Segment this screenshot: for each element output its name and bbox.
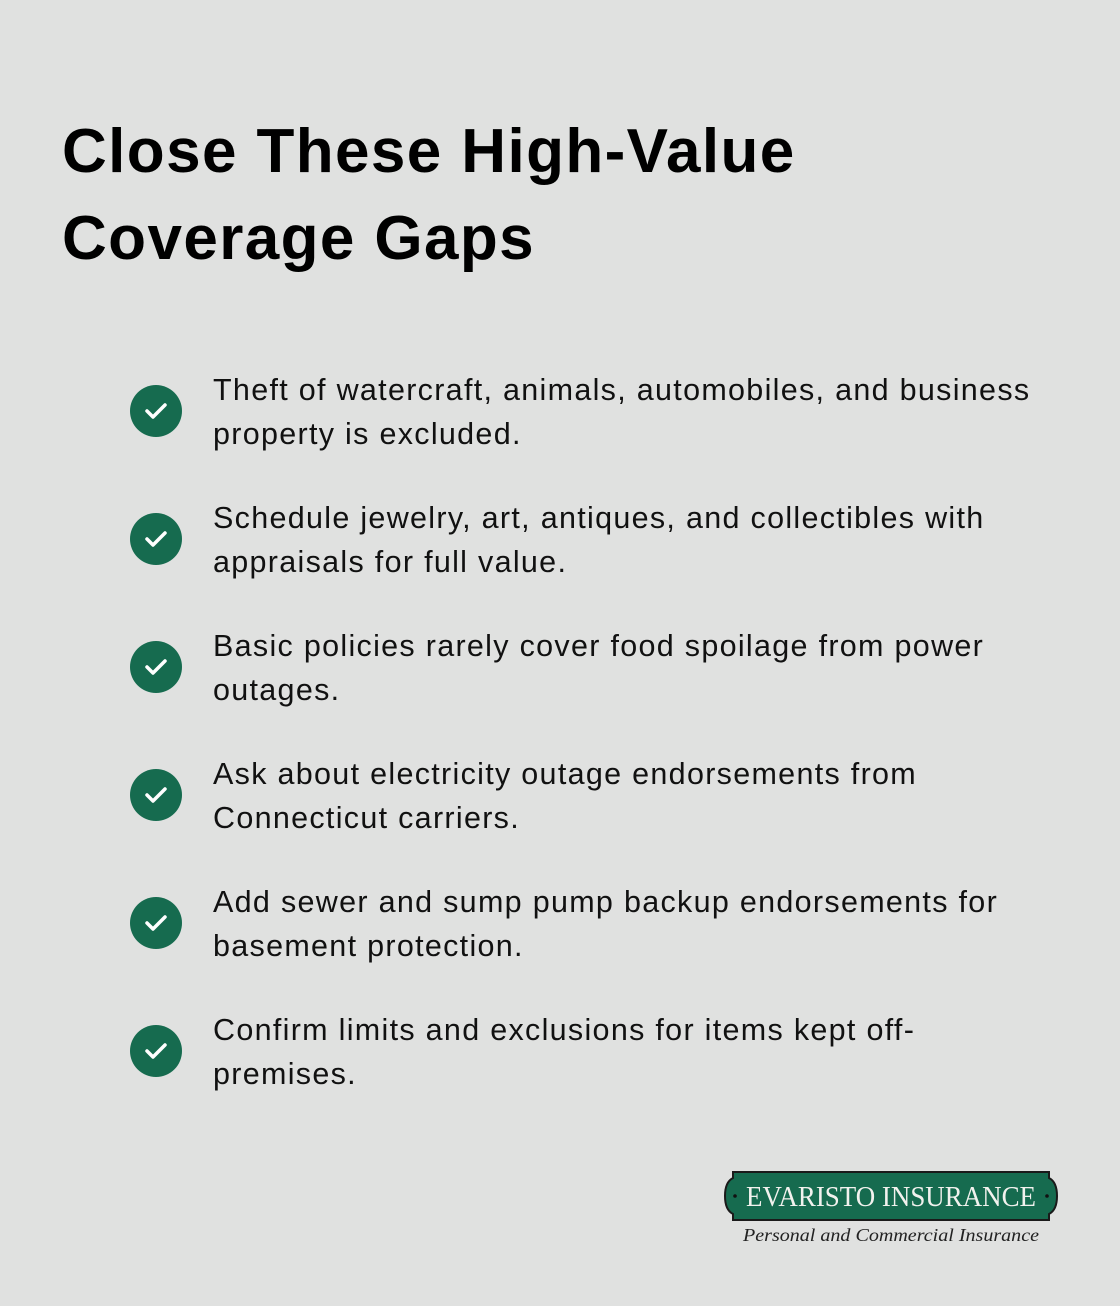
text: Schedule jewelry, art, antiques, and collectibles with <box>213 501 985 535</box>
item 5 <box>130 885 998 963</box>
text: Theft of watercraft, animals, automobiles, and business <box>213 373 1030 407</box>
text: Add sewer and sump pump backup endorsements for <box>213 885 998 919</box>
text: Ask about electricity outage endorsements from <box>213 757 917 791</box>
title: Coverage Gaps <box>62 204 535 273</box>
text <box>213 1013 915 1091</box>
icon: check <box>130 385 182 437</box>
text <box>213 501 985 579</box>
logo <box>724 1171 1058 1245</box>
text: premises. <box>213 1057 357 1091</box>
item 2 <box>130 501 985 579</box>
text: Connecticut carriers. <box>213 801 520 835</box>
title <box>62 117 796 273</box>
logo: EVARISTO INSURANCE <box>746 1181 1036 1213</box>
item 6 <box>130 1013 915 1091</box>
icon: check <box>130 641 182 693</box>
text <box>213 885 998 963</box>
text: outages. <box>213 673 340 707</box>
item 3 <box>130 629 984 707</box>
item 4 <box>130 757 917 835</box>
icon: check <box>130 513 182 565</box>
title: Close These High-Value <box>62 117 796 186</box>
icon: check <box>130 1025 182 1077</box>
text: appraisals for full value. <box>213 545 567 579</box>
icon: check <box>130 897 182 949</box>
text <box>213 629 984 707</box>
logo: Personal and Commercial Insurance <box>742 1225 1039 1245</box>
item 1 <box>130 373 1030 451</box>
text <box>213 757 917 835</box>
icon: check <box>130 769 182 821</box>
text: Basic policies rarely cover food spoilage from power <box>213 629 984 663</box>
text: property is excluded. <box>213 417 522 451</box>
text: basement protection. <box>213 929 524 963</box>
text: Confirm limits and exclusions for items kept off- <box>213 1013 915 1047</box>
text <box>213 373 1030 451</box>
